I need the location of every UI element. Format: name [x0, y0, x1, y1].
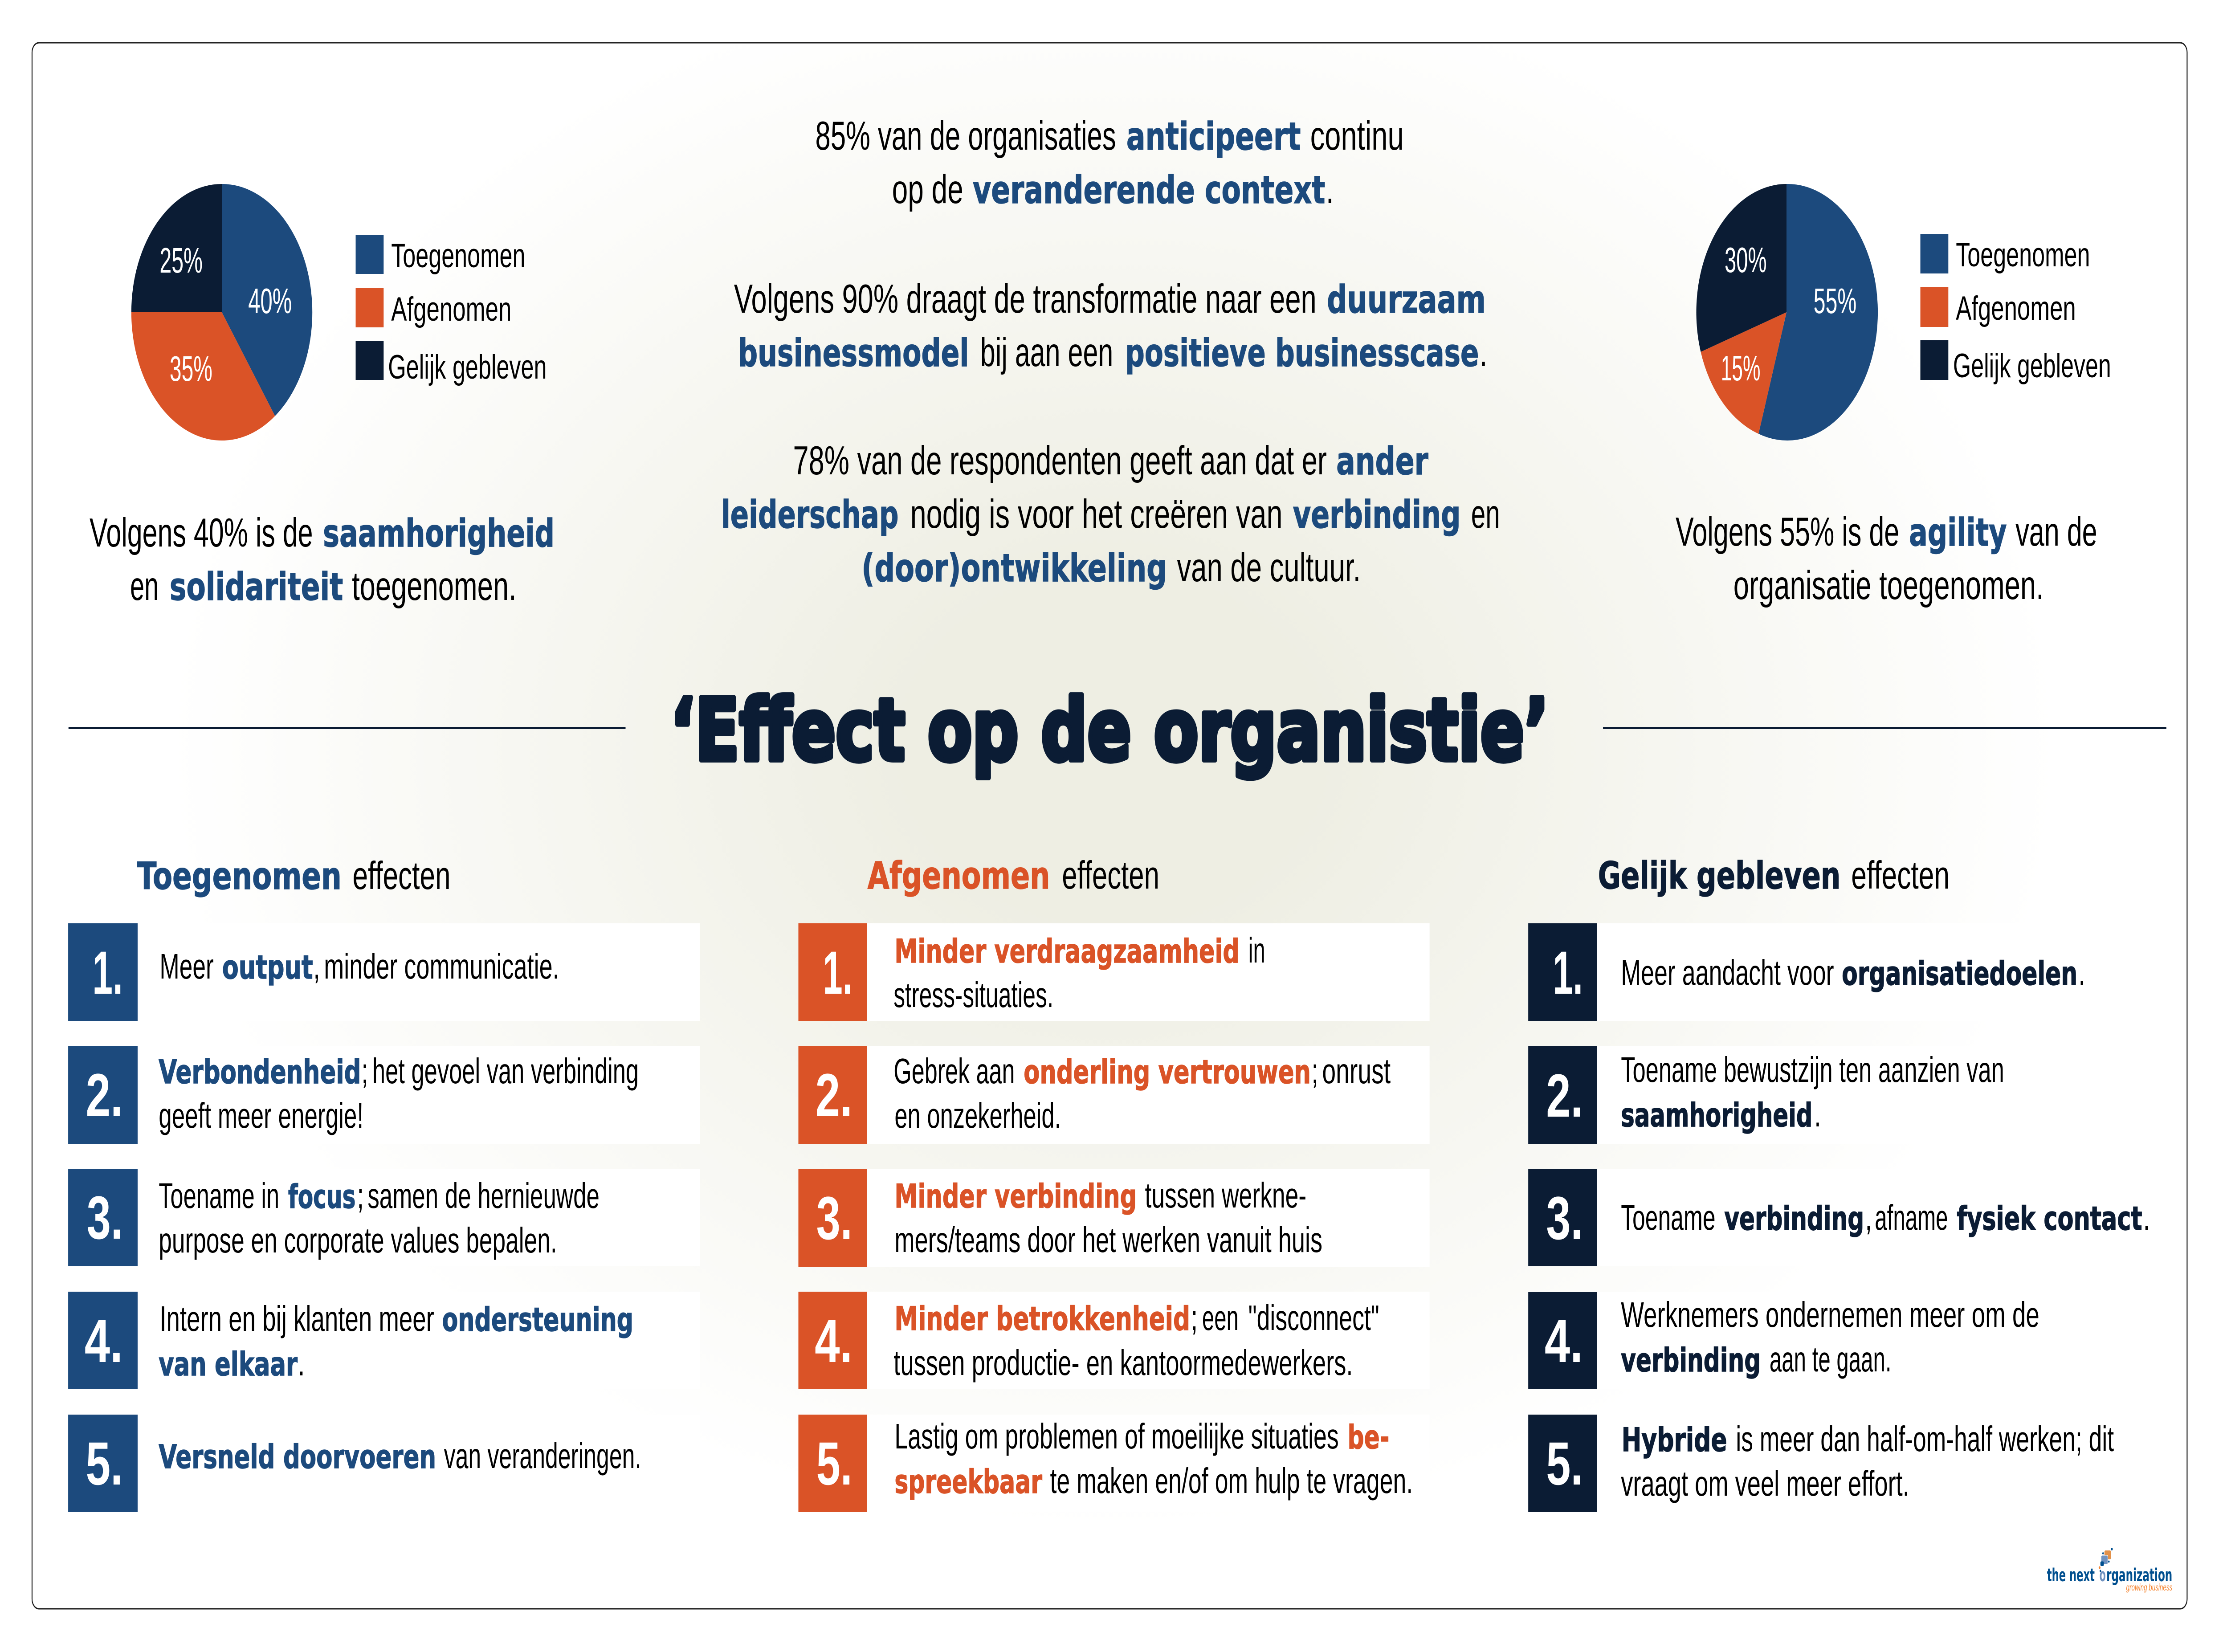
item: gelijk 1: 1.: [1553, 939, 1583, 1007]
text block: agility: agility: [1909, 510, 2007, 555]
pie chart: saamhorigheid: 35%: [170, 348, 212, 388]
item: afgenomen 1: Minder verdraagzaamheid: [894, 932, 1240, 970]
item: afgenomen 4: 4.: [815, 1308, 852, 1375]
item: gelijk 4: verbinding: [1621, 1341, 1761, 1379]
legend: left pie: Toegenomen: [391, 237, 525, 274]
item: gelijk 5: vraagt om veel meer effort.: [1621, 1463, 1909, 1503]
item: afgenomen 4: tussen productie- en kantoormedewerkers.: [893, 1342, 1353, 1383]
text block: centre statements: Volgens 90% draagt de transformatie naar een: [734, 276, 1317, 322]
item: afgenomen 4: [798, 1292, 1430, 1389]
text block: centre statements: 85% van de organisaties: [816, 113, 1116, 159]
legend: right pie: [1921, 234, 2111, 384]
item: afgenomen 3: [798, 1169, 1430, 1267]
item: toegenomen 3: [68, 1169, 700, 1266]
text block: saamhorigheid: en: [130, 563, 159, 609]
item: afgenomen 1: stress-situaties.: [893, 975, 1053, 1015]
heading: toegenomen: effecten: [352, 854, 451, 898]
item: afgenomen 4: een: [1202, 1297, 1239, 1338]
item: gelijk 3: afname: [1875, 1197, 1948, 1237]
heading: toegenomen: [137, 854, 451, 898]
legend: right pie: Afgenomen: [1956, 289, 2076, 327]
logo: the next organization: growing business: [2126, 1583, 2172, 1593]
item: gelijk 1: .: [2078, 952, 2085, 992]
item: gelijk 2: 2.: [1546, 1062, 1583, 1130]
text block: centre statements: anticipeert: [1126, 114, 1301, 159]
logo: the next organization: rganization: [2106, 1565, 2172, 1586]
panel: left statistic: [90, 184, 555, 609]
text block: centre statements: .: [1326, 167, 1334, 212]
item: toegenomen 4: ondersteuning: [442, 1301, 633, 1338]
item: afgenomen 3: tussen werkne-: [1145, 1175, 1306, 1215]
text block: centre statements: [721, 113, 1500, 591]
text block: centre statements: bij aan een: [980, 330, 1113, 375]
item: toegenomen 3: samen de hernieuwde: [367, 1175, 600, 1216]
item: toegenomen 3: Toename in: [159, 1175, 279, 1216]
pie chart: saamhorigheid: 40%: [248, 281, 292, 321]
text block: centre statements: leiderschap: [721, 492, 898, 537]
item: toegenomen 4: .: [298, 1343, 305, 1383]
panel: gelijk gebleven effecten: [1528, 853, 2166, 1512]
item: gelijk 4: [1528, 1292, 2166, 1389]
item: toegenomen 4: 4.: [85, 1308, 123, 1375]
item: toegenomen 4: van elkaar: [159, 1345, 298, 1383]
pie chart: agility: [1696, 184, 1878, 441]
item: afgenomen 4: ;: [1191, 1297, 1198, 1338]
item: gelijk 5: Hybride: [1622, 1421, 1727, 1459]
item: gelijk 4: aan te gaan.: [1770, 1339, 1892, 1379]
item: afgenomen 4: "disconnect": [1248, 1297, 1379, 1338]
item: gelijk 3: verbinding: [1724, 1199, 1864, 1237]
logo: the next organization: [2047, 1548, 2172, 1593]
item: afgenomen 2: 2.: [816, 1062, 852, 1130]
item: toegenomen 3: ;: [357, 1175, 364, 1216]
item: gelijk 1: [1528, 923, 2166, 1021]
item: afgenomen 3: mers/teams door het werken vanuit huis: [894, 1220, 1322, 1260]
item: afgenomen 2: en onzekerheid.: [894, 1095, 1061, 1135]
text block: centre statements: duurzaam: [1327, 277, 1486, 322]
item: toegenomen 2: [68, 1046, 700, 1144]
item: toegenomen 2: Verbondenheid: [159, 1053, 361, 1091]
heading: afgenomen: [868, 853, 1159, 898]
item: toegenomen 1: [68, 923, 700, 1021]
item: toegenomen 2: het gevoel van verbinding: [372, 1051, 639, 1091]
heading: gelijk gebleven: Gelijk gebleven: [1598, 855, 1840, 898]
item: afgenomen 5: be-: [1348, 1418, 1389, 1456]
item: afgenomen 2: ;: [1311, 1051, 1318, 1091]
item: gelijk 5: 5.: [1546, 1430, 1583, 1498]
text block: agility: organisatie toegenomen.: [1733, 563, 2044, 608]
logo: the next organization: o: [2100, 1565, 2106, 1586]
item: afgenomen 3: 3.: [816, 1185, 852, 1252]
item: gelijk 1: Meer aandacht voor: [1621, 952, 1834, 992]
text block: centre statements: veranderende context: [973, 167, 1325, 212]
item: afgenomen 2: onrust: [1322, 1051, 1391, 1091]
text block: centre statements: nodig is voor het creëren van: [910, 491, 1283, 537]
item: afgenomen 4: Minder betrokkenheid: [894, 1300, 1190, 1338]
item: toegenomen 1: ,: [313, 946, 320, 986]
item: toegenomen 5: 5.: [86, 1430, 123, 1498]
item: toegenomen 1: minder communicatie.: [324, 946, 559, 986]
item: toegenomen 2: geeft meer energie!: [159, 1095, 363, 1135]
text block: centre statements: 78% van de respondenten geeft aan dat er: [793, 438, 1327, 483]
item: gelijk 3: Toename: [1621, 1197, 1716, 1237]
item: gelijk 3: 3.: [1546, 1185, 1583, 1252]
item: afgenomen 2: onderling vertrouwen: [1024, 1053, 1311, 1091]
item: toegenomen 4: Intern en bij klanten meer: [159, 1298, 434, 1338]
item: toegenomen 3: focus: [288, 1178, 356, 1216]
heading: toegenomen: Toegenomen: [137, 855, 342, 898]
item: toegenomen 3: 3.: [87, 1184, 123, 1252]
legend: left pie: Afgenomen: [391, 290, 511, 328]
item: toegenomen 1: 1.: [92, 939, 123, 1007]
item: toegenomen 5: [68, 1415, 700, 1512]
legend: left pie: Gelijk gebleven: [388, 348, 547, 386]
item: afgenomen 1: 1.: [823, 939, 852, 1007]
item: afgenomen 1: [798, 923, 1430, 1021]
panel: toegenomen effecten: [68, 854, 700, 1512]
text block: agility: [1676, 509, 2097, 608]
item: toegenomen 5: Versneld doorvoeren: [159, 1438, 436, 1476]
item: afgenomen 1: in: [1248, 930, 1265, 970]
item: toegenomen 1: output: [222, 948, 313, 986]
text block: centre statements: en: [1471, 491, 1500, 537]
item: gelijk 4: 4.: [1545, 1308, 1583, 1375]
heading: gelijk gebleven: effecten: [1851, 853, 1950, 897]
text block: centre statements: ander: [1336, 439, 1428, 484]
item: gelijk 2: .: [1814, 1094, 1821, 1134]
item: afgenomen 5: Lastig om problemen of moeilijke situaties: [894, 1416, 1339, 1456]
item: afgenomen 3: Minder verbinding: [894, 1177, 1137, 1215]
text block: centre statements: van de cultuur.: [1177, 545, 1361, 590]
item: gelijk 3: .: [2143, 1197, 2150, 1237]
pie chart: agility: 30%: [1725, 240, 1767, 280]
panel: afgenomen effecten: [798, 853, 1430, 1512]
pie chart: agility: 55%: [1814, 281, 1856, 321]
item: toegenomen 5: van veranderingen.: [444, 1436, 641, 1476]
item: toegenomen 2: ;: [361, 1051, 368, 1091]
item: afgenomen 5: [798, 1415, 1430, 1512]
legend: right pie: Gelijk gebleven: [1953, 347, 2111, 384]
text block: agility: Volgens 55% is de: [1676, 509, 1899, 555]
item: gelijk 4: Werknemers ondernemen meer om de: [1621, 1294, 2039, 1334]
text block: saamhorigheid: Volgens 40% is de: [90, 510, 313, 555]
item: gelijk 2: [1528, 1046, 2166, 1144]
heading: afgenomen: effecten: [1062, 853, 1159, 897]
pie chart: saamhorigheid: 25%: [159, 240, 203, 280]
item: afgenomen 5: 5.: [816, 1430, 852, 1498]
text block: saamhorigheid: saamhorigheid: [323, 511, 555, 556]
pie chart: agility: 15%: [1721, 348, 1760, 388]
legend: right pie: Toegenomen: [1956, 236, 2090, 273]
text block: centre statements: (door)ontwikkeling: [861, 546, 1167, 591]
item: afgenomen 2: Gebrek aan: [893, 1051, 1015, 1091]
item: gelijk 2: saamhorigheid: [1621, 1096, 1813, 1134]
title: ‘Effect op de organistie’: [670, 681, 1549, 780]
item: gelijk 5: [1528, 1415, 2166, 1512]
text block: centre statements: businessmodel: [738, 330, 969, 375]
panel: right statistic: [1676, 184, 2111, 608]
text block: saamhorigheid: [90, 510, 555, 609]
item: gelijk 1: organisatiedoelen: [1842, 954, 2077, 992]
item: gelijk 5: is meer dan half-om-half werken; dit: [1736, 1419, 2114, 1459]
item: afgenomen 5: te maken en/of om hulp te vragen.: [1050, 1460, 1413, 1501]
pie chart: saamhorigheid: [131, 184, 312, 441]
text block: centre statements: verbinding: [1293, 492, 1460, 537]
text block: centre statements: continu: [1310, 113, 1404, 159]
item: gelijk 3: ,: [1865, 1197, 1872, 1237]
text block: saamhorigheid: solidariteit: [170, 564, 343, 609]
item: toegenomen 3: purpose en corporate values bepalen.: [159, 1220, 557, 1260]
text block: saamhorigheid: toegenomen.: [352, 563, 517, 609]
logo: the next organization: the next: [2047, 1565, 2095, 1586]
text block: centre statements: .: [1480, 330, 1488, 375]
heading: gelijk gebleven: [1598, 853, 1950, 898]
item: gelijk 3: fysiek contact: [1957, 1199, 2142, 1237]
text block: agility: van de: [2015, 509, 2097, 555]
heading: afgenomen: Afgenomen: [868, 855, 1050, 898]
item: afgenomen 2: [798, 1046, 1430, 1144]
item: toegenomen 4: [68, 1292, 700, 1389]
item: afgenomen 5: spreekbaar: [894, 1463, 1042, 1501]
item: toegenomen 1: Meer: [159, 946, 214, 986]
item: gelijk 3: [1528, 1169, 2166, 1266]
legend: left pie: [356, 235, 547, 386]
text block: centre statements: op de: [892, 167, 963, 212]
text block: centre statements: positieve businesscase: [1125, 330, 1479, 375]
item: toegenomen 2: 2.: [86, 1062, 123, 1130]
item: gelijk 2: Toename bewustzijn ten aanzien van: [1621, 1049, 2004, 1089]
